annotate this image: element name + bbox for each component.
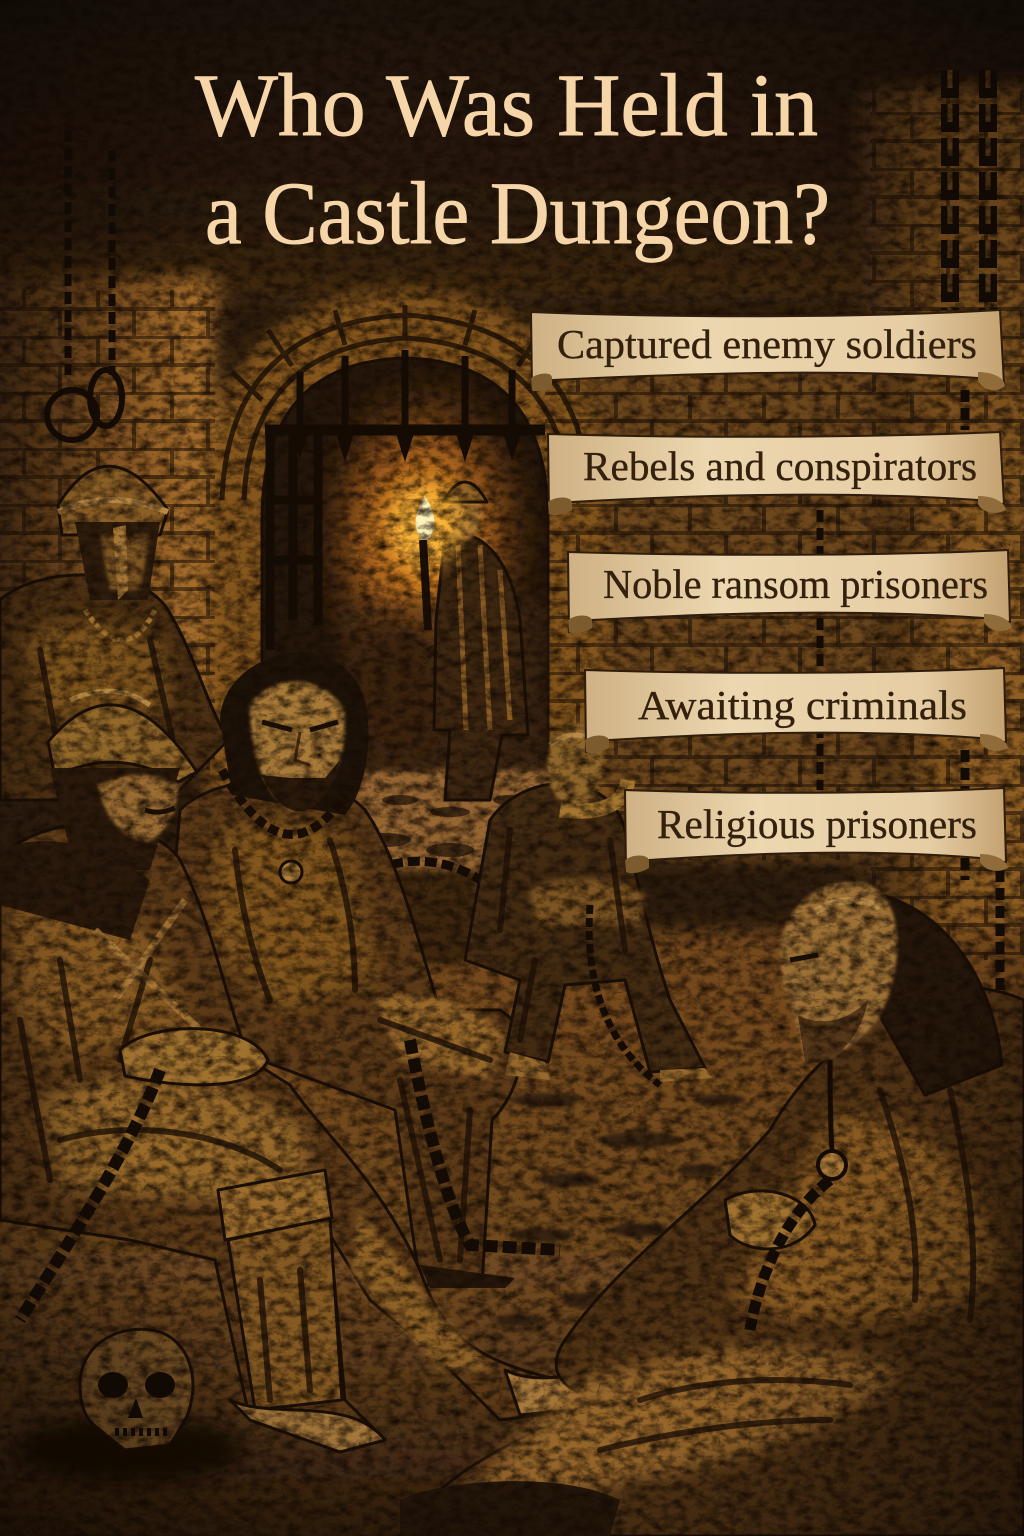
- banner: religious prisoners: [625, 788, 1008, 873]
- cobbled floor in the corridor: [340, 770, 620, 965]
- wall chains: [47, 70, 1000, 1000]
- torch flame: [389, 483, 461, 630]
- banner: religious prisoners: Religious prisoners: [657, 801, 977, 847]
- figure: soldier seated in front: [0, 691, 630, 1452]
- title: Who Was Held in: [195, 57, 818, 155]
- gate spikes: [290, 430, 522, 462]
- banner: captured enemy soldiers: Captured enemy soldiers: [557, 321, 977, 367]
- banner: awaiting criminals: [585, 668, 1008, 753]
- banner: noble ransom prisoners: Noble ransom prisoners: [603, 561, 988, 607]
- banner: noble ransom prisoners: [568, 550, 1012, 633]
- title: [195, 57, 830, 263]
- figure: standing soldier in helmet: [0, 466, 228, 800]
- banner: rebels and conspirators: [548, 432, 1006, 515]
- banner: rebels and conspirators: Rebels and conspirators: [583, 443, 977, 489]
- figure: seated prisoner with long hair: [165, 652, 560, 1288]
- figure: old prisoner resting on hand: [465, 723, 712, 1085]
- figure: hooded monk: [400, 882, 1024, 1536]
- stone archway and iron gate: [222, 305, 590, 790]
- banner: awaiting criminals: Awaiting criminals: [638, 682, 967, 728]
- banner: captured enemy soldiers: [531, 310, 1005, 392]
- lower floor cobbles: [496, 1093, 746, 1326]
- icon: skull on the floor: [15, 1329, 245, 1484]
- figure: guard with torch: [343, 482, 528, 800]
- title: a Castle Dungeon?: [205, 165, 830, 263]
